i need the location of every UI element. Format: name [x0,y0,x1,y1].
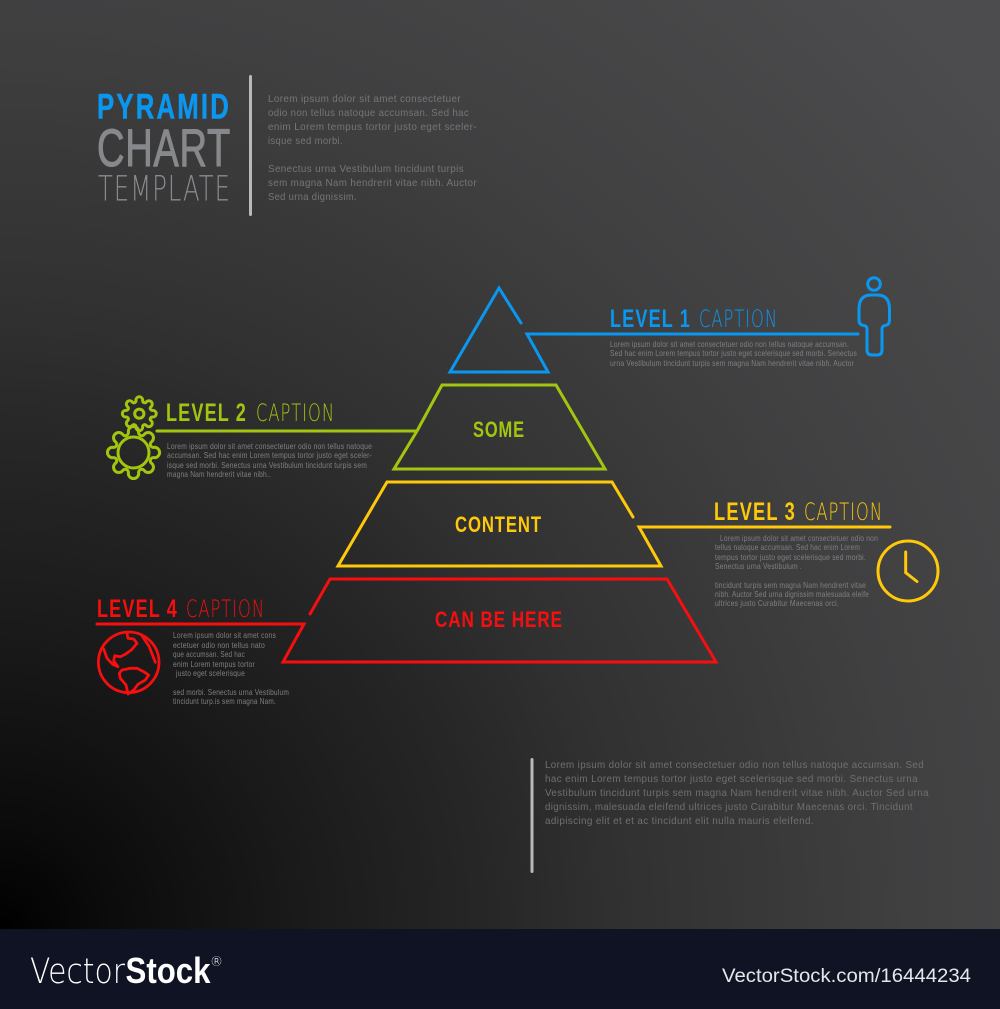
pyramid label: content: CONTENT [455,512,542,537]
bottom text [545,759,929,827]
level 1 caption: CAPTION [699,305,778,333]
title block [97,88,231,210]
level 1 text: Lorem ipsum dolor sit amet consectetuer odio non tellus natoque accumsan. [610,339,849,349]
bottom text: adipiscing elit et et ac tincidunt elit nulla mauris eleifend. [545,815,814,827]
intro text: odio non tellus natoque accumsan. Sed hac [268,107,469,119]
icon: gears [107,397,160,479]
intro text: Lorem ipsum dolor sit amet consectetuer [268,93,461,105]
level 3 caption: LEVEL 3 [714,498,796,526]
title: pyramid: PYRAMID [97,88,231,126]
pyramid label: some: SOME [473,417,525,442]
level 4 text: sed morbi. Senectus urna Vestibulum [173,687,289,697]
title: chart: CHART [97,119,231,178]
intro text: sem magna Nam hendrerit vitae nibh. Auctor [268,177,477,189]
level 4 caption [97,595,265,623]
title divider [249,75,252,216]
level 4 text [173,630,289,706]
level 3 text: ultrices justo Curabitur Maecenas orci. [715,598,839,608]
level 3 text [715,533,878,608]
level 4 text: enim Lorem tempus tortor [173,659,255,669]
level 2 text: magna Nam hendrerit vitae nibh.. [167,469,271,479]
pyramid label: can be here: CAN BE HERE [435,607,563,632]
level 4 text: ectetuer odio non tellus nato [173,640,265,650]
level 3 text: Senectus urna Vestibulum . [715,561,802,571]
level 4 caption: LEVEL 4 [97,595,178,623]
level 3 caption [714,498,883,526]
level 2 caption: LEVEL 2 [166,399,247,427]
level 3 caption: CAPTION [804,498,883,526]
level 1 text [610,339,857,368]
level 1 text: urna Vestibulum tincidunt turpis sem magna Nam hendrerit vitae nibh. Auctor [610,358,854,368]
intro text: Sed urna dignissim. [268,191,357,203]
bottom text: Lorem ipsum dolor sit amet consectetuer odio non tellus natoque accumsan. Sed [545,759,924,771]
level 3 text: tempus tortor justo eget scelerisque sed morbi. [715,552,866,562]
bottom text: hac enim Lorem tempus tortor justo eget scelerisque sed morbi. Senectus urna [545,773,918,785]
icon: clock [878,541,938,601]
level 1 caption [610,305,778,333]
level 1 caption: LEVEL 1 [610,305,691,333]
level 1 text: Sed hac enim Lorem tempus tortor justo eget scelerisque sed morbi. Senectus [610,348,857,358]
bottom divider [530,758,534,873]
bottom text: Vestibulum tincidunt turpis sem magna Nam hendrerit vitae nibh. Auctor Sed urna [545,787,929,799]
icon: person [859,278,890,355]
pyramid level 2 outline and leader [157,385,605,469]
footer logo: Vector [30,952,126,992]
level 3 text: tincidunt turpis sem magna Nam hendrerit vitae [715,580,866,590]
footer logo: Stock [126,950,211,991]
intro text [268,93,477,203]
level 4 text: Lorem ipsum dolor sit amet cons [173,630,276,640]
pyramid level 3 outline and leader [338,482,890,566]
pyramid level 4 outline and leader [97,579,716,662]
level 4 text: justo eget scelerisque [175,668,245,678]
intro text: enim Lorem tempus tortor justo eget sceler- [268,121,477,133]
level 2 text: isque sed morbi. Senectus urna Vestibulum tincidunt turpis sem [167,460,367,470]
level 4 caption: CAPTION [186,595,265,623]
bottom text: dignissim, malesuada eleifend ultrices justo Curabitur Maecenas orci. Tincidunt [545,801,913,813]
footer url: VectorStock.com/16444234 [722,965,971,987]
intro text: Senectus urna Vestibulum tincidunt turpis [268,163,464,175]
level 2 text [167,441,372,479]
level 4 text: que accumsan. Sed hac [173,649,245,659]
footer bar [0,929,1000,1009]
level 2 text: Lorem ipsum dolor sit amet consectetuer odio non tellus natoque [167,441,372,451]
intro text: isque sed morbi. [268,135,343,147]
title: template: TEMPLATE [98,170,231,210]
icon: globe [98,632,159,694]
level 3 text: nibh. Auctor Sed urna dignissim malesuada eleife [715,589,869,599]
level 2 text: accumsan. Sed hac enim Lorem tempus tortor justo eget sceler- [167,450,372,460]
footer registered mark: ® [210,955,223,970]
level 4 text: tincidunt turp.is sem magna Nam. [173,696,276,706]
level 2 caption [166,399,335,427]
footer logo [30,950,211,992]
level 2 caption: CAPTION [256,399,335,427]
level 3 text: Lorem ipsum dolor sit amet consectetuer odio non [720,533,878,543]
level 3 text: tellus natoque accumsan. Sed hac enim Lorem [715,542,860,552]
pyramid level 1 outline and leader [450,288,858,372]
